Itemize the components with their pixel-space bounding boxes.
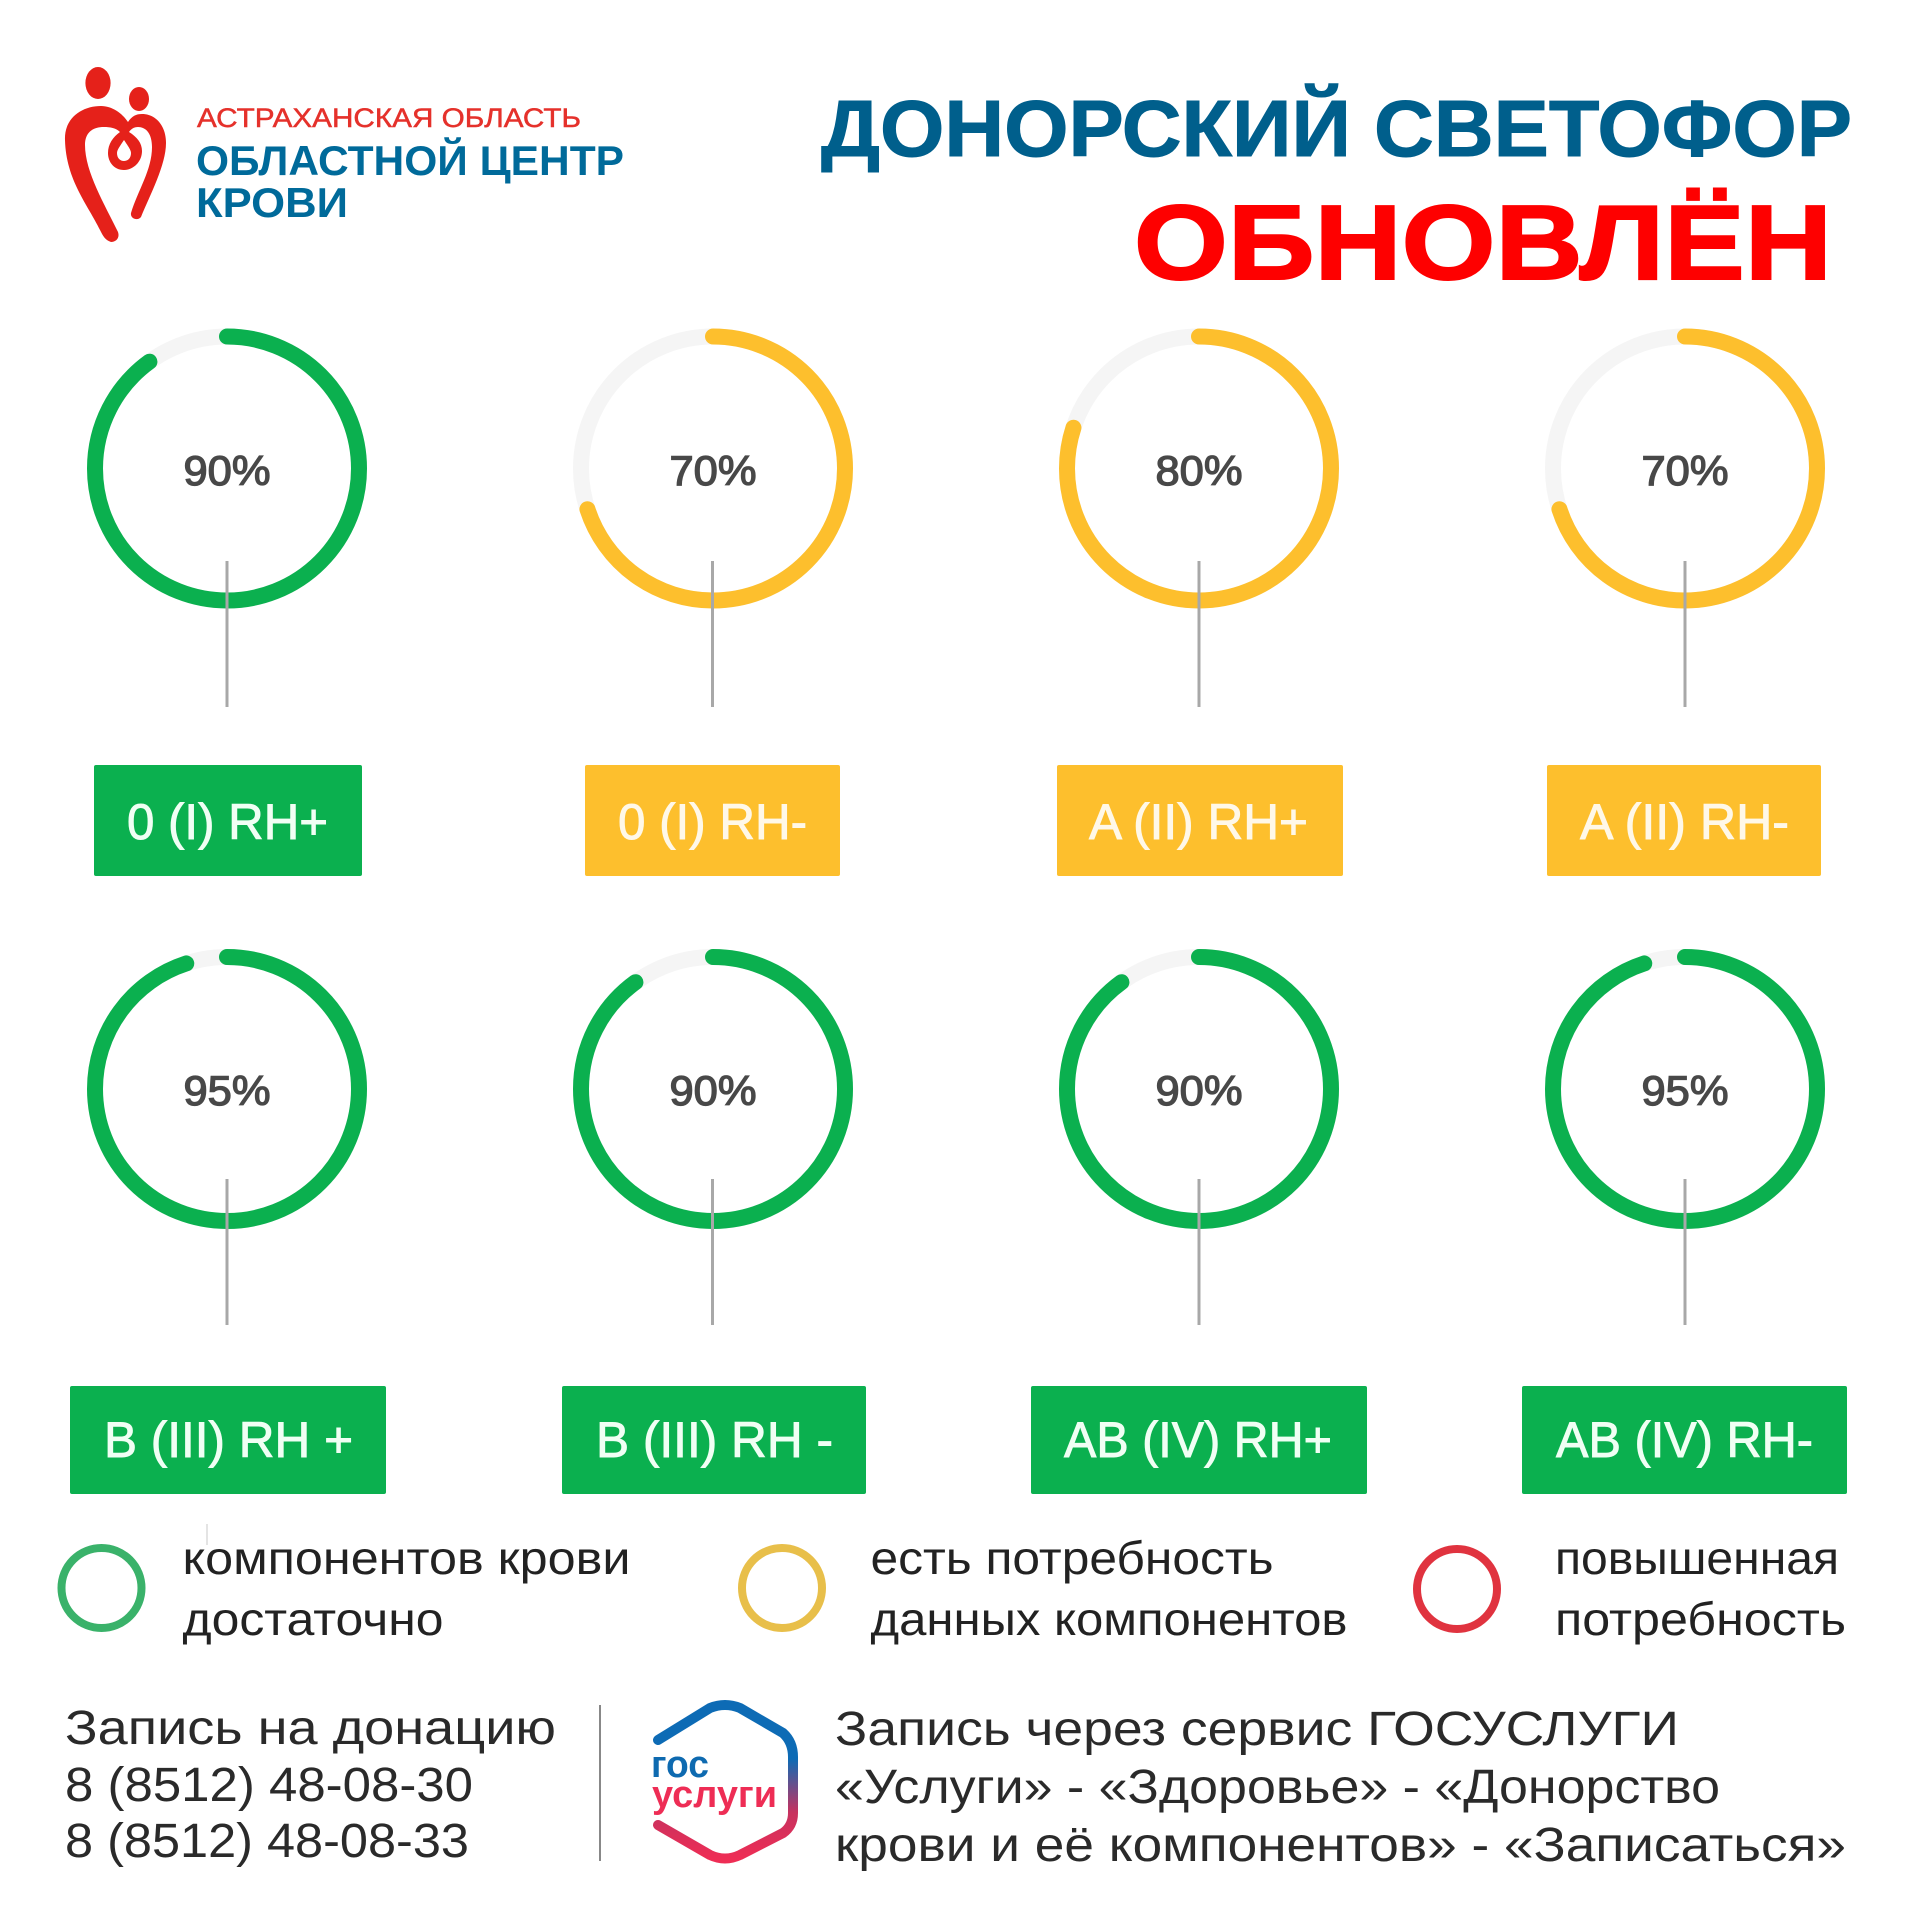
gauge: A (II) RH-: A (II) RH- — [1580, 794, 1789, 850]
gauge: B (III) RH -: B (III) RH - — [596, 1412, 833, 1468]
legend: enough components: достаточно — [182, 1593, 444, 1645]
gauge: A (II) RH+ — [1057, 336, 1343, 876]
icon: gosuslugi logo — [651, 1705, 793, 1858]
logo text: centre name: ОБЛАСТНОЙ ЦЕНТР — [196, 136, 624, 184]
contact phones: 8 (8512) 48-08-30 — [65, 1759, 473, 1812]
icon: gosuslugi logo: услуги — [652, 1774, 777, 1816]
legend: there is a need — [742, 1532, 1348, 1645]
legend: enough components — [62, 1532, 630, 1645]
legend: there is a need: данных компонентов — [870, 1593, 1348, 1645]
legend: increased need: потребность — [1555, 1593, 1846, 1645]
gosuslugi instructions: крови и её компонентов» - «Записаться» — [835, 1819, 1846, 1872]
logo: regional blood centre — [65, 67, 624, 242]
contact phones: Запись на донацию — [65, 1702, 556, 1755]
gauge: 0 (I) RH-: 0 (I) RH- — [618, 794, 807, 850]
gauge: A (II) RH- — [1547, 336, 1821, 876]
gosuslugi instructions: Запись через сервис ГОСУСЛУГИ — [835, 1703, 1679, 1756]
logo text: blood: КРОВИ — [196, 179, 348, 226]
gauge: AB (IV) RH-: 95% — [1642, 1067, 1728, 1114]
gauge: B (III) RH -: 90% — [670, 1067, 756, 1114]
title line: donor traffic light: ДОНОРСКИЙ СВЕТОФОР — [821, 83, 1852, 173]
legend: increased need: повышенная — [1555, 1532, 1839, 1584]
gauge: B (III) RH - — [562, 957, 866, 1494]
gauge: B (III) RH + — [70, 957, 386, 1494]
gauge: A (II) RH+: 80% — [1156, 447, 1242, 494]
gauge: AB (IV) RH- — [1522, 957, 1847, 1494]
gauge: AB (IV) RH-: AB (IV) RH- — [1556, 1412, 1813, 1468]
gosuslugi instructions: «Услуги» - «Здоровье» - «Донорство — [835, 1761, 1720, 1814]
gauge: AB (IV) RH+: 90% — [1156, 1067, 1242, 1114]
gauge: A (II) RH-: 70% — [1642, 447, 1728, 494]
legend: increased need — [1417, 1532, 1846, 1645]
title line: updated: ОБНОВЛЁН — [1134, 184, 1832, 302]
gauge: 0 (I) RH+: 90% — [184, 447, 270, 494]
gauge: B (III) RH +: B (III) RH + — [104, 1412, 353, 1468]
title — [821, 83, 1852, 302]
icon: heart with figures — [65, 67, 166, 242]
icon: gosuslugi logo: гос — [651, 1744, 709, 1786]
gauge: A (II) RH+: A (II) RH+ — [1089, 794, 1308, 850]
gosuslugi instructions — [835, 1703, 1846, 1872]
legend: enough components: компонентов крови — [182, 1532, 630, 1584]
legend: there is a need: есть потребность — [870, 1532, 1274, 1584]
gauge: AB (IV) RH+ — [1031, 957, 1367, 1494]
gauge: 0 (I) RH+: 0 (I) RH+ — [127, 794, 328, 850]
gauge: 0 (I) RH+ — [94, 336, 362, 876]
contact phones: 8 (8512) 48-08-33 — [65, 1815, 469, 1868]
gauge: 0 (I) RH-: 70% — [670, 447, 756, 494]
gauge: AB (IV) RH+: AB (IV) RH+ — [1064, 1412, 1332, 1468]
contact phones — [65, 1702, 556, 1868]
logo text: region: АСТРАХАНСКАЯ ОБЛАСТЬ — [197, 103, 581, 133]
gauge: 0 (I) RH- — [581, 336, 845, 876]
gauge: B (III) RH +: 95% — [184, 1067, 270, 1114]
